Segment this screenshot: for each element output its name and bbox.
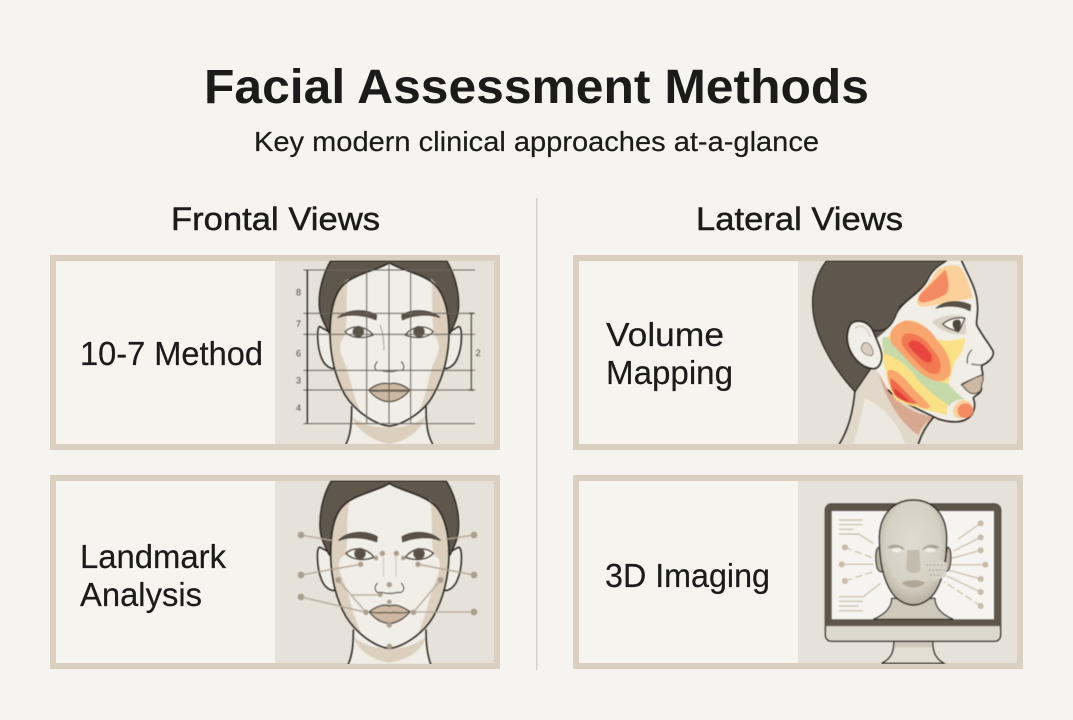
- illustration: monitor with 3D head: [825, 500, 1001, 663]
- heading: frontal views: Frontal Views: [171, 201, 380, 237]
- left annotations: [839, 520, 881, 611]
- panel: volume mapping: [576, 258, 1020, 447]
- panel: landmark analysis: [53, 478, 497, 666]
- illustration: face with measurement grid: [296, 261, 481, 444]
- monitor stand: [882, 640, 944, 663]
- label: 10-7 method: 10-7 Method: [80, 335, 263, 372]
- measurement numbers: [296, 287, 481, 413]
- landmark lines: [301, 535, 474, 612]
- subtitle: Key modern clinical approaches at-a-glance: [254, 126, 819, 157]
- right annotations: [944, 520, 988, 609]
- illustration: profile heat map: [813, 261, 993, 444]
- label: volume mapping: Volume: [606, 316, 724, 353]
- panel: 3D imaging: [576, 478, 1020, 666]
- 3D head: [873, 500, 953, 619]
- measurement numbers: 3: [296, 375, 301, 385]
- measurement numbers: 8: [296, 287, 301, 297]
- label: landmark analysis: Landmark: [80, 538, 226, 575]
- title: Facial Assessment Methods: [204, 61, 869, 114]
- measurement grid: [303, 261, 475, 424]
- label: volume mapping: [606, 316, 733, 391]
- measurement numbers: 6: [296, 348, 301, 358]
- measurement numbers: 2: [476, 348, 481, 358]
- measurement numbers: 7: [296, 319, 301, 329]
- panel: 10-7 method: [53, 258, 497, 447]
- label: landmark analysis: Analysis: [80, 576, 202, 613]
- heat map: forehead: [917, 265, 973, 307]
- heat map: cheek and jaw: [882, 320, 965, 415]
- monitor: [825, 504, 1001, 641]
- label: landmark analysis: [80, 538, 226, 613]
- label: 3D imaging: 3D Imaging: [605, 557, 770, 594]
- landmark dots: [298, 532, 477, 649]
- heat map: chin: [953, 400, 973, 418]
- measurement numbers: 4: [296, 403, 301, 413]
- label: volume mapping: Mapping: [606, 354, 733, 391]
- illustration: face with landmarks: [298, 481, 477, 664]
- heading: lateral views: Lateral Views: [696, 201, 903, 237]
